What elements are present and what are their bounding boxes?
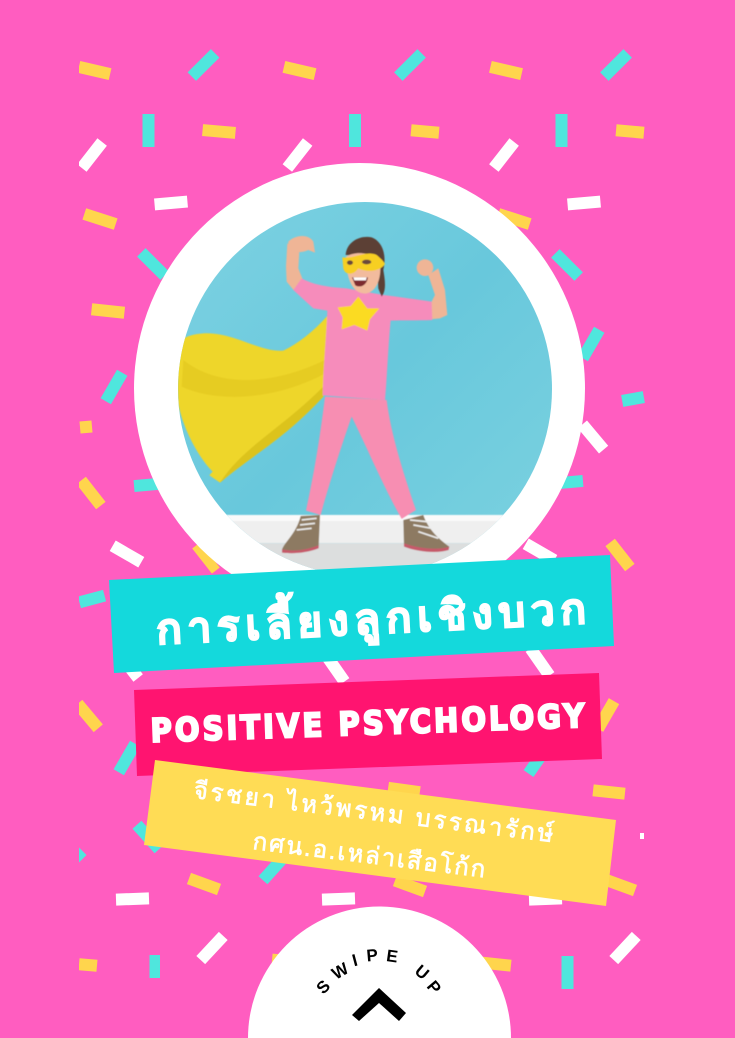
icon: up chevron [352,988,406,1021]
title text: การเลี้ยงลูกเชิงบวก [155,577,587,656]
banner: teal Thai title [109,555,614,673]
baseboard [232,520,498,544]
mouth [352,277,368,286]
swipe up badge [248,906,511,1038]
floor [170,543,560,583]
mask [342,254,385,274]
banner: yellow authors [144,760,616,906]
photo: girl superhero [170,202,560,583]
fists [288,236,315,253]
white circle frame [134,163,585,614]
face [346,253,380,293]
banner: crimson subtitle [134,673,602,776]
authors line 1: จีรชยา ไหว้พรหม บรรณารักษ์ [192,776,556,848]
authors line 2: กศน.อ.เหล่าเสือโก้ก [251,827,487,883]
arms [286,243,303,291]
star [338,297,379,331]
legs [306,397,416,519]
confetti [70,49,645,989]
subtitle text: POSITIVE PSYCHOLOGY [150,697,586,750]
shoes [282,515,320,552]
cape [178,316,327,483]
shirt [293,278,432,400]
hair [346,237,385,297]
swipe up label: SWIPE UP [313,946,445,998]
